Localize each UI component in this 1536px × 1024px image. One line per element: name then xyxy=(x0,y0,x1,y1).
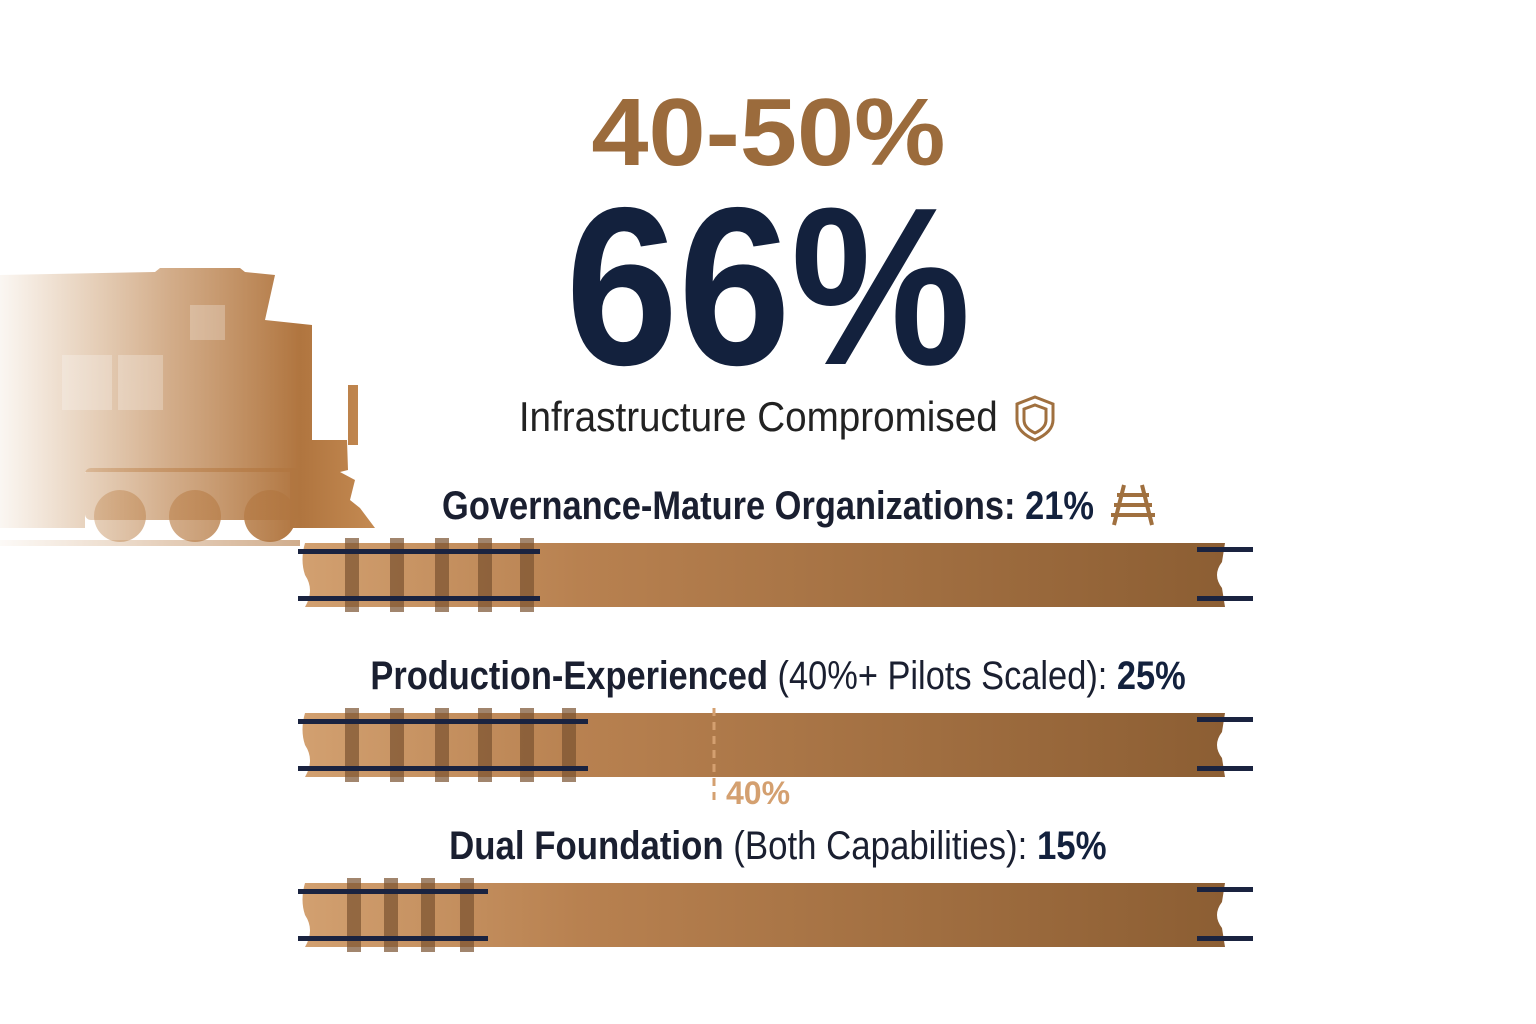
subtitle: Infrastructure Compromised xyxy=(519,393,997,440)
icon: shield xyxy=(1017,397,1053,440)
big stat: 66%: 66% xyxy=(565,160,971,412)
label 3: Dual Foundation (Both Capabilities): 15% xyxy=(449,824,1107,868)
label 1: Governance-Mature Organizations: 21% xyxy=(442,484,1094,528)
bar 1 xyxy=(298,538,1253,612)
bar 2 xyxy=(298,708,1253,806)
bar 3 xyxy=(298,878,1253,952)
small stat: 40-50%: 40-50% xyxy=(591,79,945,186)
label 2: Production-Experienced (40%+ Pilots Scaled): 25% xyxy=(370,654,1186,698)
marker label 40%: 40% xyxy=(726,775,790,811)
icon: railway track xyxy=(1111,485,1155,525)
